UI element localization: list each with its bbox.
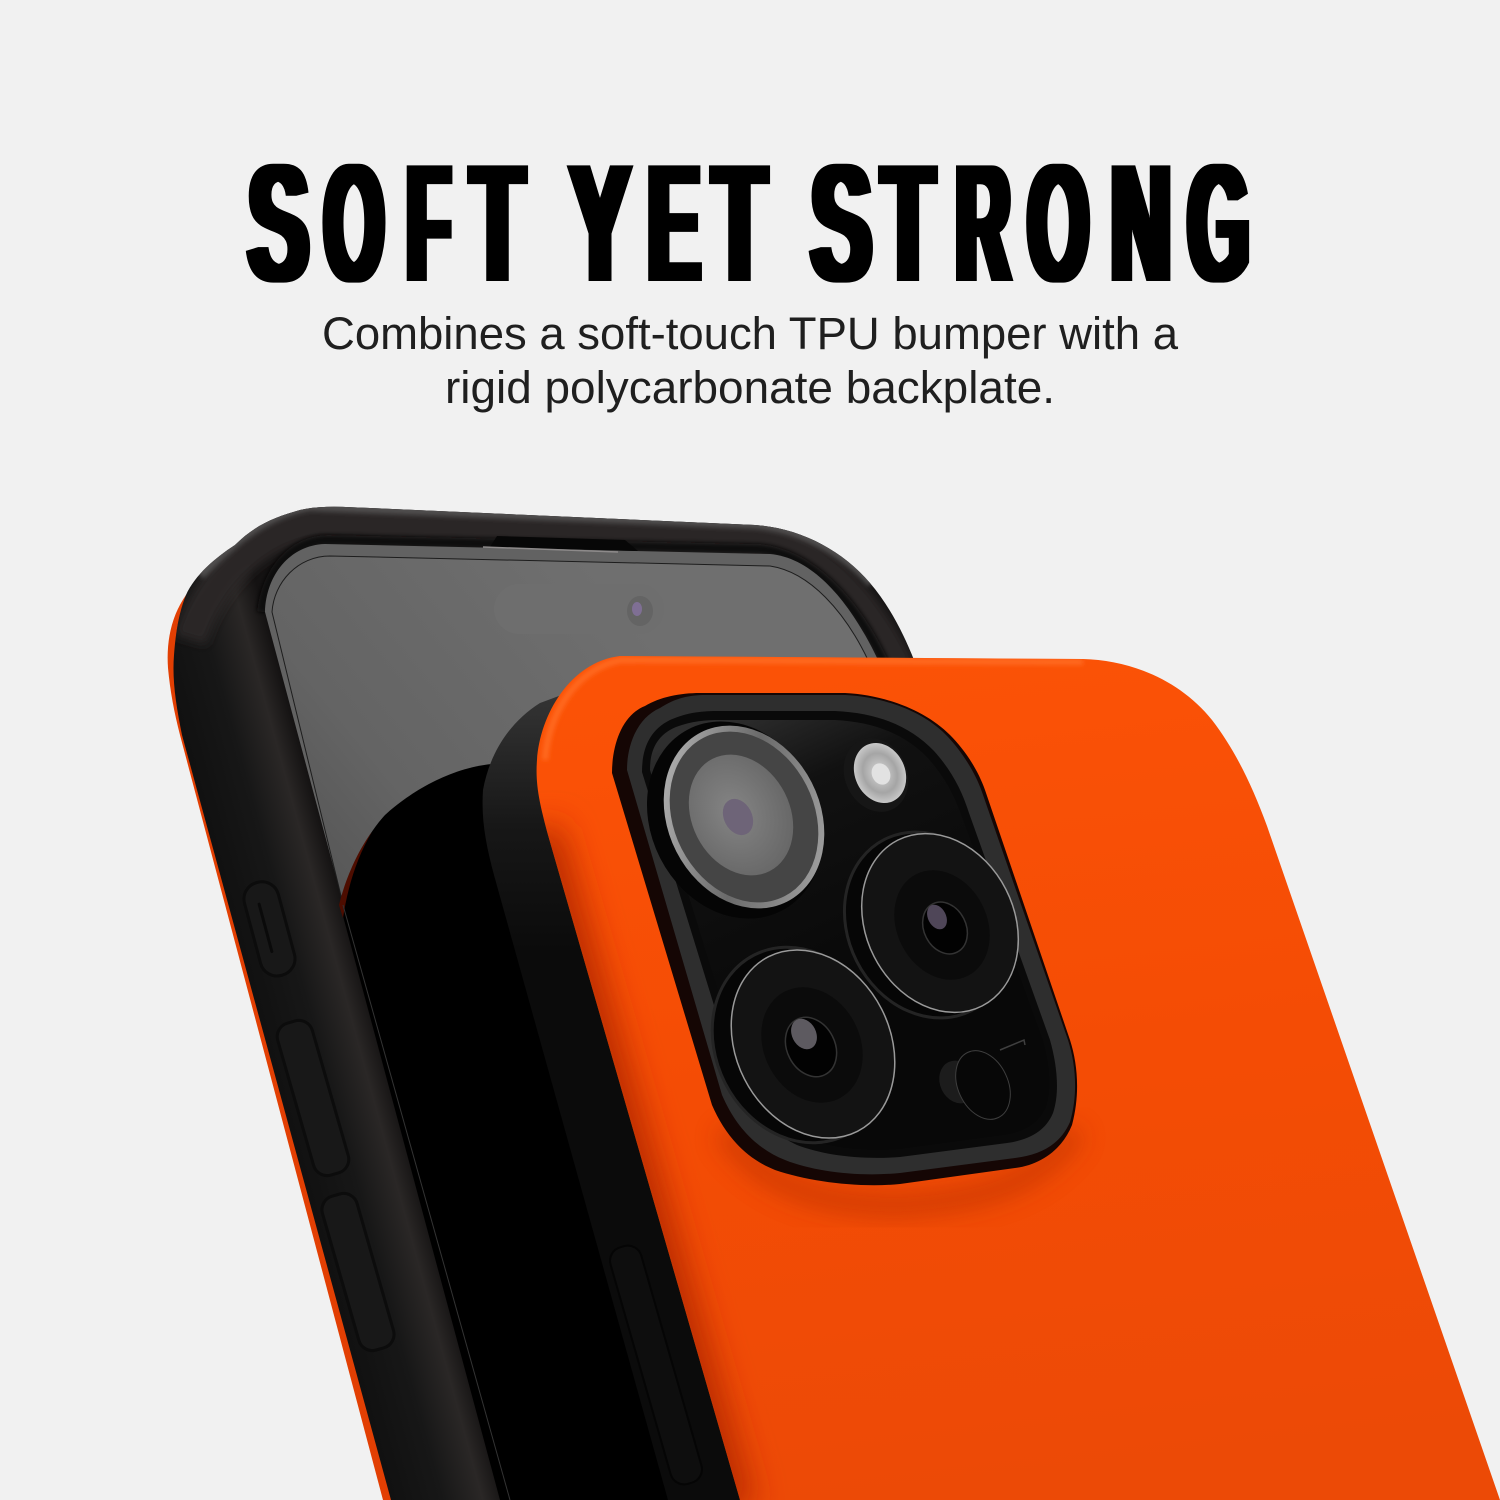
lidar barrel xyxy=(932,1054,984,1110)
interior red edge xyxy=(339,832,372,918)
lens colour glint xyxy=(632,602,642,616)
lens two glint xyxy=(923,901,951,933)
title: T xyxy=(713,129,766,317)
front phone xyxy=(483,656,1500,1500)
lens three pupil xyxy=(776,1008,846,1086)
subtitle: rigid polycarbonate backplate. xyxy=(445,362,1055,413)
screen bezel and glass xyxy=(265,544,878,910)
lens inner xyxy=(669,737,813,893)
bumper xyxy=(173,507,960,1500)
interior black xyxy=(340,764,780,1500)
button slot xyxy=(257,902,274,953)
shadow under camera xyxy=(725,1130,1075,1205)
lens reflection xyxy=(717,794,759,840)
lens glass xyxy=(641,706,847,928)
bumper top highlight xyxy=(200,506,872,583)
flash disc xyxy=(844,734,916,812)
orange case edge xyxy=(168,595,480,1500)
flash base xyxy=(832,727,920,823)
camera glass plate xyxy=(650,720,1050,1150)
orange backplate xyxy=(537,656,1500,1500)
main lens: clear glass xyxy=(614,691,856,949)
title: O xyxy=(1028,129,1088,317)
microphone mark xyxy=(1000,1040,1025,1050)
title: E xyxy=(648,129,700,317)
title: N xyxy=(1111,129,1171,317)
front phone black side xyxy=(483,690,745,1500)
lens two xyxy=(813,803,1048,1047)
lens base xyxy=(614,691,856,949)
title: R xyxy=(956,129,1010,317)
front camera lens xyxy=(627,596,653,626)
bumper inner dark edge xyxy=(262,540,885,665)
bumper side buttons xyxy=(240,878,397,1354)
subtitle: Combines a soft-touch TPU bumper with a xyxy=(322,308,1179,359)
lens two face xyxy=(832,807,1048,1039)
flash center xyxy=(868,760,894,788)
lens three face xyxy=(700,922,926,1166)
bumper mid tone xyxy=(190,522,900,670)
side button xyxy=(607,1242,705,1488)
inner screen hairline xyxy=(343,905,510,1500)
lidar disc xyxy=(945,1042,1021,1128)
speaker silver line xyxy=(483,547,618,552)
lidar sensor xyxy=(932,1042,1021,1128)
title: O xyxy=(324,129,384,317)
speaker notch xyxy=(490,536,638,551)
title: F xyxy=(407,129,450,317)
title: T xyxy=(471,129,524,317)
camera dark outer edge xyxy=(612,693,1077,1185)
lens two barrel xyxy=(813,803,1043,1047)
flash xyxy=(832,727,920,823)
subtitle xyxy=(322,308,1179,413)
title: Y xyxy=(570,129,630,317)
back phone with black bumper xyxy=(168,506,960,1500)
title xyxy=(248,129,1249,317)
camera inner black lip xyxy=(642,711,1057,1158)
dynamic island xyxy=(494,584,664,634)
silver ring xyxy=(633,698,855,936)
lens body xyxy=(627,596,653,626)
title: T xyxy=(882,129,934,317)
lens two pupil xyxy=(914,894,976,962)
title: S xyxy=(811,129,872,317)
lens three inner xyxy=(742,970,882,1120)
camera bumper ring xyxy=(627,695,1075,1174)
screen xyxy=(272,556,868,900)
lens three glint xyxy=(786,1014,822,1054)
text: G xyxy=(1188,129,1249,317)
orange edge shading xyxy=(540,660,1083,1500)
bumper corner and top shading xyxy=(190,506,900,670)
camera module xyxy=(612,691,1077,1185)
lens three xyxy=(679,917,926,1173)
lens two inner xyxy=(876,854,1008,996)
dark left edge xyxy=(540,830,735,1500)
title: S xyxy=(248,129,309,317)
light top rim xyxy=(545,660,1083,760)
lens three barrel xyxy=(679,917,921,1173)
